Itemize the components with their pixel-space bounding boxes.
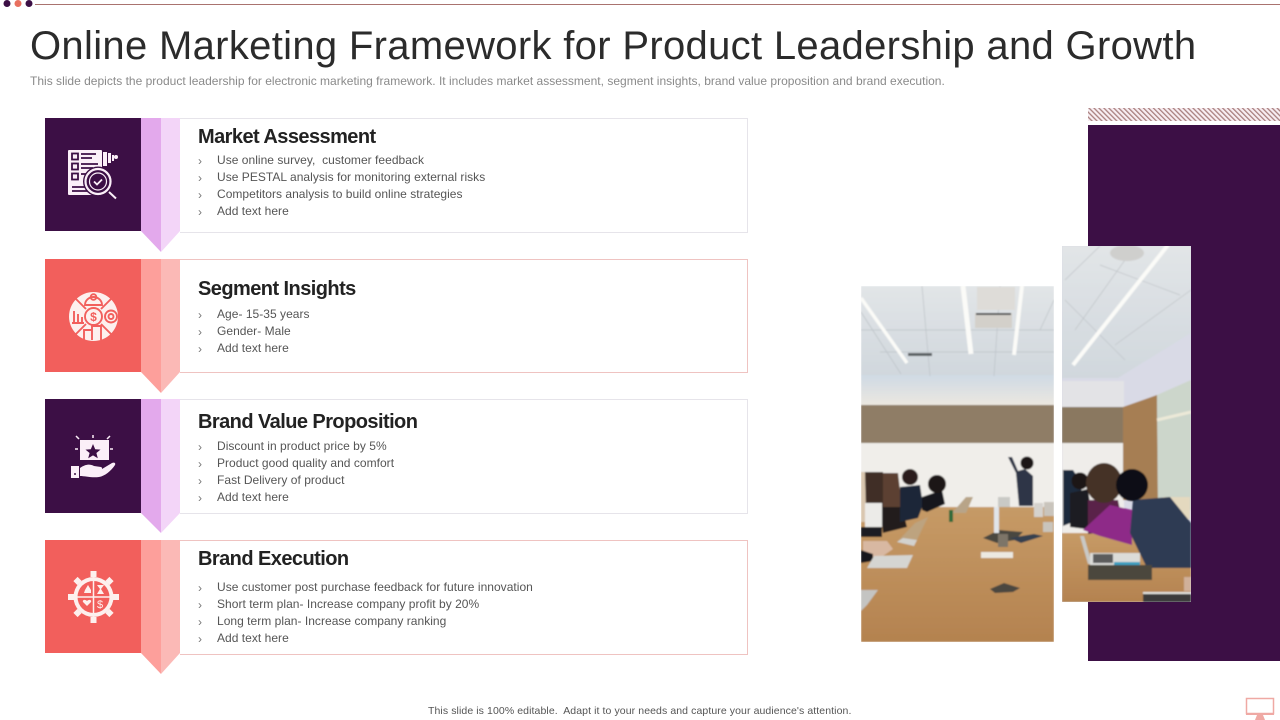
bullet list: Age- 15-35 years xyxy=(217,307,310,321)
bullet list: Short term plan- Increase company profit by 20% xyxy=(217,597,479,611)
bullet list: Long term plan- Increase company ranking xyxy=(217,614,446,628)
panel: segment insights xyxy=(45,259,748,393)
heading: Market Assessment xyxy=(198,126,376,148)
left photo panel xyxy=(861,286,1054,642)
bullet list: Product good quality and comfort xyxy=(217,456,394,470)
laptop and notebook xyxy=(1080,536,1191,602)
heading: Segment Insights xyxy=(198,278,356,300)
heading: Brand Value Proposition xyxy=(198,411,417,433)
card outline xyxy=(180,399,748,514)
icon: survey checklist with magnifier xyxy=(68,150,118,198)
bullet list: Gender- Male xyxy=(217,324,291,338)
right photo panel xyxy=(1062,245,1191,602)
panel: market assessment xyxy=(45,118,748,252)
ribbon and icon block xyxy=(45,399,180,533)
seated people right xyxy=(1063,463,1191,568)
bullet list: Add text here xyxy=(217,204,289,218)
icon: monitor xyxy=(1246,698,1274,720)
bullet list xyxy=(198,580,533,645)
bullet list: Add text here xyxy=(217,631,289,645)
bullet list: Add text here xyxy=(217,490,289,504)
seated people xyxy=(861,469,946,563)
ribbon and icon block xyxy=(45,118,180,252)
bullet list xyxy=(198,307,310,355)
bullet list xyxy=(198,439,394,504)
footer note: This slide is 100% editable. Adapt it to your needs and capture your audience's attention. xyxy=(428,705,851,717)
table items xyxy=(861,497,1054,611)
bullet list: Use online survey, customer feedback xyxy=(217,153,424,167)
title: Online Marketing Framework for Product Leadership and Growth xyxy=(30,24,1196,68)
card outline xyxy=(180,118,748,233)
bullet list: Use customer post purchase feedback for future innovation xyxy=(217,580,533,594)
bullet list: Competitors analysis to build online strategies xyxy=(217,187,463,201)
photo: meeting room in two panels xyxy=(861,246,1191,642)
ribbon and icon block xyxy=(45,259,180,393)
icon: gear with four quadrants: $ xyxy=(97,599,103,611)
icon: hand holding star box xyxy=(71,435,115,478)
subtitle: This slide depicts the product leadership for electronic marketing framework. It includes market assessment, segment insights, brand value proposition and brand execution. xyxy=(30,74,945,88)
bullet list: Fast Delivery of product xyxy=(217,473,344,487)
bullet list: Discount in product price by 5% xyxy=(217,439,387,453)
panel: brand value proposition xyxy=(45,399,748,533)
ribbon and icon block xyxy=(45,540,180,674)
panel: brand execution xyxy=(45,540,748,674)
top decoration: dots and rule xyxy=(4,0,1280,7)
card outline xyxy=(180,540,748,655)
right decoration: hatch strip and purple panel xyxy=(1088,108,1280,661)
bullet list xyxy=(198,153,485,218)
icon: segment wheel: $ xyxy=(90,310,97,324)
card outline xyxy=(180,259,748,373)
heading: Brand Execution xyxy=(198,548,349,570)
presenter xyxy=(1008,456,1034,506)
bullet list: Add text here xyxy=(217,341,289,355)
bullet list: Use PESTAL analysis for monitoring external risks xyxy=(217,170,485,184)
